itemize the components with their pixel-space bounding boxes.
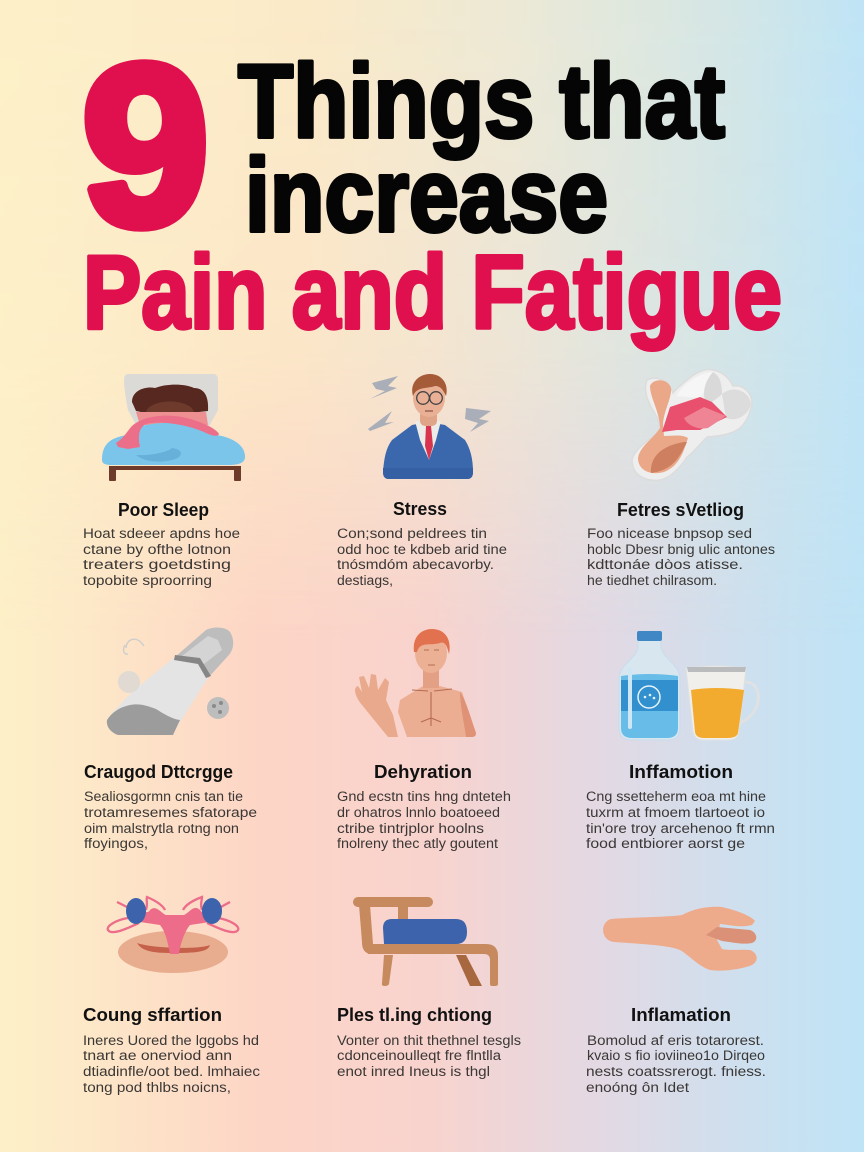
description: Sealiosgormn cnis tan tie [84,789,243,804]
heading: Inffamotion [629,762,733,782]
heading: Craugod Dttcrgge [84,762,233,782]
description: Ineres Uored the lggobs hd [83,1033,259,1048]
panel: inffamotion drinks [586,631,775,851]
description: kdttonáe dòos atisse. [587,557,743,572]
description [337,1033,521,1079]
description: tnósmdóm abecavorby. [337,557,494,572]
icon: water bottle and juice cup [619,631,758,740]
description: Foo nicease bnpsop sed [587,526,752,541]
description: dtiadinfle/oot bed. lmhaiec [83,1064,260,1079]
description: fnolreny thec atly goutent [337,836,498,851]
description: trotamresemes sfatorape [84,805,257,820]
icon: person sleeping in bed [102,374,245,481]
description [337,789,511,851]
description: he tiedhet chilrasom. [587,573,717,588]
description: tin'ore troy arcehenoo ft rmn [586,821,775,836]
description: Con;sond peldrees tin [337,526,487,541]
panel: inflamation [586,907,766,1095]
description: tuxrm at fmoem tlartoeot io [586,805,765,820]
panel: ples tl.ing chtiong [337,897,521,1079]
description: Cng ssetteherm eoa mt hine [586,789,766,804]
description: ctribe tintrjplor hoolns [337,821,484,836]
description: enot inred Ineus is thgl [337,1064,490,1079]
icon: wooden chair with blue cushion [353,897,498,986]
description: hoblc Dbesr bnig ulic antones [587,542,775,557]
panel: fetres svetliog [587,369,775,588]
description: food entbiorer aorst ge [586,836,745,851]
title [82,19,782,351]
panel: coung sffartion [83,897,260,1095]
large number 9: 9 [82,19,209,273]
icon: uterus and ovaries [108,897,238,973]
description [83,526,240,588]
heading: Poor Sleep [118,500,209,520]
description: ctane by ofthe lotnon [83,542,231,557]
description: oim malstrytla rotng non [84,821,239,836]
description: ffoyingos, [84,836,148,851]
description [586,1033,766,1095]
title line: Things that: Things that [238,44,725,160]
description: odd hoc te kdbeb arid tine [337,542,507,557]
description: nests coatssrerogt. fniess. [586,1064,766,1079]
icon: grey compression sleeve [107,628,233,735]
panel: stress [337,374,507,588]
heading: Ples tl.ing chtiong [337,1005,492,1025]
panel: dehyration [337,629,511,851]
description: cdonceinoulleqt fre flntlla [337,1048,502,1063]
icon: tired shirtless man [355,629,476,737]
description: enoóng ôn Idet [586,1080,689,1095]
panel: craugod dttcrgge [84,628,257,851]
description: topobite sproorring [83,573,212,588]
description [84,789,257,851]
description: Gnd ecstn tins hng dnteteh [337,789,511,804]
icon: stressed man in suit [368,374,491,479]
description: kvaio s fio ioviineo1o Dirqeo [587,1048,765,1063]
description: tnart ae onerviod ann [83,1048,232,1063]
heading: Coung sffartion [83,1005,222,1025]
heading: Stress [393,499,447,519]
description [83,1033,260,1095]
description: Vonter on thit thethnel tesgls [337,1033,521,1048]
description [337,526,507,588]
description: dr ohatros lnnlo boatoeed [337,805,500,820]
heading: Fetres sVetliog [617,500,744,520]
description: Bomolud af eris totarorest. [587,1033,764,1048]
description: Hoat sdeeer apdns hoe [83,526,240,541]
icon: swollen joint [632,369,752,480]
description [587,526,775,588]
description: treaters goetdsting [83,557,231,572]
panel: poor sleep [83,374,245,588]
heading: Inflamation [631,1005,731,1025]
description [586,789,775,851]
title line: increase: increase [245,138,608,254]
description: destiags, [337,573,393,588]
description: tong pod thlbs noicns, [83,1080,231,1095]
heading: Dehyration [374,762,472,782]
icon: inflamed hand [603,907,757,971]
